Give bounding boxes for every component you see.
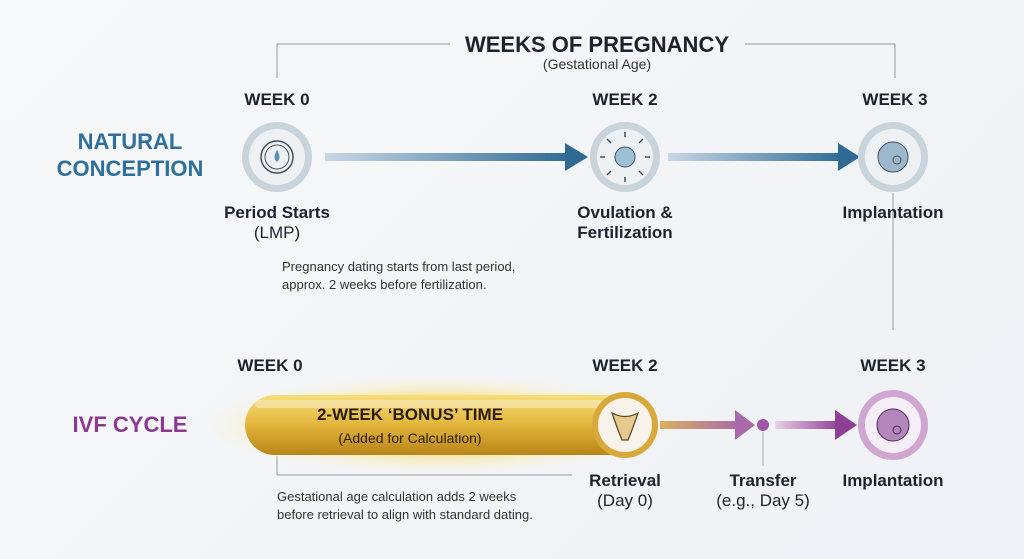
natural labels: (LMP) <box>254 223 300 242</box>
arrows <box>325 143 588 171</box>
icon: implantation natural <box>858 122 928 192</box>
note ivf: Gestational age calculation adds 2 weeks <box>277 489 516 504</box>
ivf labels: Retrieval <box>589 471 661 490</box>
text: Ovulation & <box>577 203 673 222</box>
row label: IVF: IVF CYCLE <box>73 412 187 437</box>
note natural: Pregnancy dating starts from last period, <box>282 259 515 274</box>
top week labels <box>244 90 928 109</box>
note ivf: before retrieval to align with standard dating. <box>277 507 533 522</box>
natural labels: Period Starts <box>224 203 330 222</box>
ivf labels: (Day 0) <box>597 491 653 510</box>
bonus text: 2-WEEK ‘BONUS’ TIME <box>317 405 503 424</box>
note ivf <box>277 489 533 522</box>
icon: retrieval <box>592 392 658 458</box>
text: (e.g., Day 5) <box>716 491 810 510</box>
top week labels: WEEK 2 <box>592 90 658 109</box>
row label: natural conception: CONCEPTION <box>57 156 203 181</box>
bottom week labels: WEEK 2 <box>592 356 658 375</box>
bottom week labels: WEEK 0 <box>237 356 303 375</box>
row label: natural conception <box>57 129 203 181</box>
gold bar <box>200 375 680 475</box>
icon: ovulation <box>590 122 660 192</box>
icon: period <box>242 122 312 192</box>
note natural: approx. 2 weeks before fertilization. <box>282 277 486 292</box>
top week labels: WEEK 3 <box>862 90 928 109</box>
bonus text <box>317 405 503 446</box>
top week labels: WEEK 0 <box>244 90 310 109</box>
icon: implantation ivf <box>858 390 928 460</box>
title: WEEKS OF PREGNANCY <box>465 32 729 57</box>
ivf labels <box>589 471 661 510</box>
subtitle: (Gestational Age) <box>543 56 651 72</box>
natural labels <box>224 203 330 242</box>
row label: natural conception: NATURAL <box>78 129 182 154</box>
bottom week labels: WEEK 3 <box>860 356 926 375</box>
bonus text: (Added for Calculation) <box>338 430 482 446</box>
text: Implantation <box>842 471 944 490</box>
ivf arrows <box>660 410 857 440</box>
note natural <box>282 259 515 292</box>
bottom week labels <box>237 356 926 375</box>
text: Implantation <box>842 203 944 222</box>
text: Fertilization <box>577 223 673 242</box>
text: Transfer <box>729 471 797 490</box>
